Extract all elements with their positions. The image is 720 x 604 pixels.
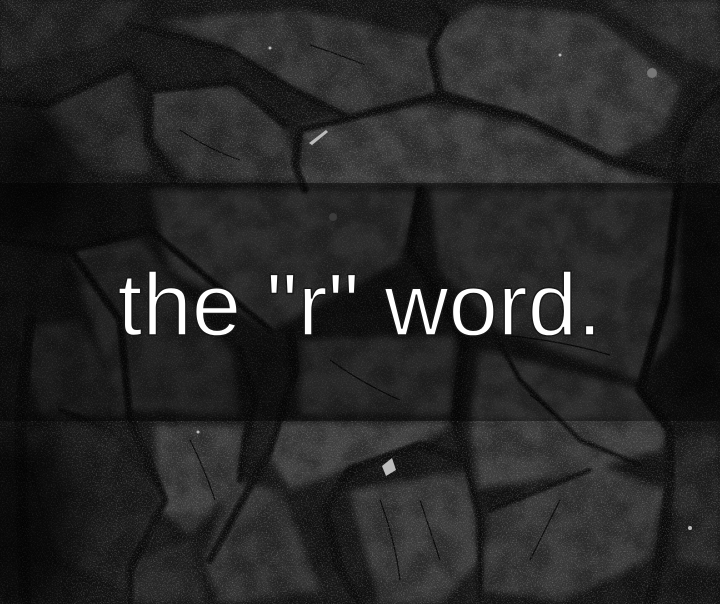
title: the "r" word.	[118, 255, 602, 354]
dark translucent band	[0, 183, 720, 421]
light chips	[196, 46, 692, 530]
fine cracks	[180, 45, 610, 580]
